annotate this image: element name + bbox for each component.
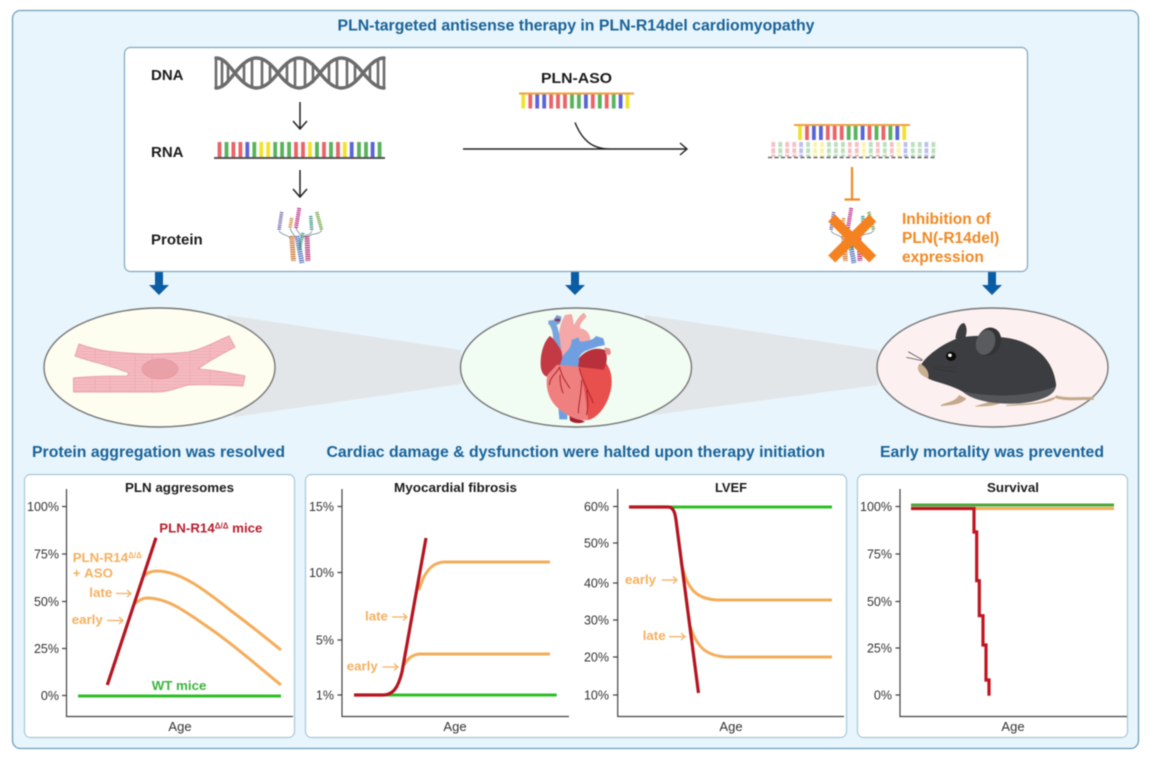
icon: RNA strand [214, 142, 385, 158]
label: late: late [89, 585, 112, 600]
icon: crossed protein [831, 208, 874, 263]
y-axis labels: 25% [867, 642, 892, 656]
x-axis label: Age [1001, 719, 1025, 734]
arrow: inhibition [844, 167, 860, 200]
line: early ASO [681, 562, 832, 600]
line: mutant [354, 538, 426, 695]
panel: cardiac charts [306, 474, 846, 738]
label: RNA: RNA [151, 144, 184, 161]
label: early: early [347, 659, 378, 674]
y-axis labels: 60% [584, 500, 609, 514]
label: late: late [643, 628, 666, 643]
y-axis labels: 50% [34, 595, 59, 609]
line: late ASO [690, 626, 832, 657]
line: PLN-R14 mice [107, 538, 156, 685]
y-axis labels: 100% [860, 500, 892, 514]
text: inhibition of expression: expression [902, 249, 984, 266]
label: PLN-R14 + ASO: + ASO [73, 566, 113, 581]
line: mutant [629, 507, 698, 693]
label: late: late [365, 609, 388, 624]
chart: myocardial fibrosis [309, 480, 569, 734]
y-axis labels: 50% [867, 595, 892, 609]
label: early [72, 612, 123, 627]
arrow: to heart level [565, 271, 585, 295]
icon: ASO bound to faded RNA [768, 125, 937, 158]
y-axis labels: 25% [34, 642, 59, 656]
ellipse: heart [460, 308, 692, 427]
y-axis labels: 40% [584, 576, 609, 590]
label: early [347, 659, 398, 674]
chart title: survival: Survival [987, 480, 1039, 495]
y-axis labels: 75% [867, 548, 892, 562]
panel: PLN aggresomes chart [24, 474, 294, 738]
icon: heart [541, 313, 612, 423]
axes [896, 489, 1127, 716]
label: early: early [72, 612, 103, 627]
label: PLN-R14 mice: mice [228, 521, 262, 536]
y-axis labels [27, 500, 59, 703]
line: mutant [911, 508, 989, 696]
zoom wedge: heart to mouse [645, 315, 878, 415]
icon: DNA helix [216, 58, 384, 88]
y-axis labels: 20% [584, 650, 609, 664]
x-axis label: Age [168, 719, 192, 734]
line: WT [911, 504, 1114, 506]
y-axis labels: 0% [41, 689, 59, 703]
y-axis labels: 10% [584, 688, 609, 702]
line: ASO treated [911, 507, 1114, 510]
heading: early mortality: Early mortality was prevented [880, 444, 1104, 461]
heading: protein aggregation: Protein aggregation was resolved [32, 444, 285, 461]
axes [338, 489, 569, 716]
icon: ASO strand [519, 94, 634, 108]
label: late [89, 585, 131, 600]
arrow: ASO binding to RNA [463, 122, 687, 155]
label: PLN-R14 mice: PLN-R14 [159, 521, 215, 536]
label: late [365, 609, 407, 624]
chart title: LVEF: LVEF [715, 480, 747, 495]
line: early ASO [404, 654, 550, 665]
text: inhibition of expression: Inhibition of [902, 211, 992, 228]
label: late [643, 628, 685, 643]
panel: survival chart [858, 474, 1128, 738]
icon: cardiomyocyte [74, 336, 245, 395]
y-axis labels: 100% [27, 500, 59, 514]
line: control [354, 694, 557, 696]
label: PLN-ASO: PLN-ASO [541, 70, 612, 87]
label: PLN-R14 + ASO: Δ/Δ [128, 551, 142, 560]
arrow: to mouse level [982, 271, 1002, 295]
label: PLN-R14 mice: Δ/Δ [215, 522, 229, 531]
icon: mouse [906, 323, 1094, 407]
y-axis labels: 75% [34, 548, 59, 562]
arrow: to cell level [149, 271, 169, 295]
arrow: DNA to RNA [293, 102, 307, 129]
label: PLN-R14 + ASO: PLN-R14 [73, 550, 129, 565]
panel: mechanism [124, 48, 1028, 272]
label: early [625, 572, 677, 587]
line: early ASO [134, 598, 281, 685]
line: WT mice [78, 694, 281, 698]
y-axis labels: 15% [309, 500, 334, 514]
y-axis labels: 10% [309, 566, 334, 580]
axes [613, 489, 844, 716]
line: control [668, 506, 832, 508]
ellipse: mouse [877, 308, 1108, 427]
y-axis labels: 1% [316, 688, 334, 702]
label: early: early [625, 572, 657, 587]
y-axis labels: 5% [316, 634, 334, 648]
label: protein: Protein [151, 232, 203, 248]
title: PLN-targeted antisense therapy in PLN-R14del cardiomyopathy [338, 18, 815, 34]
y-axis labels: 50% [584, 536, 609, 550]
icon: protein [279, 208, 322, 263]
heading: cardiac damage: Cardiac damage & dysfunction were halted upon therapy initiation [326, 444, 825, 461]
y-axis labels: 0% [874, 688, 892, 702]
chart: LVEF [584, 480, 844, 734]
y-axis labels [584, 500, 609, 702]
chart title: PLN aggresomes: PLN aggresomes [125, 480, 234, 495]
y-axis labels [309, 500, 334, 702]
text: inhibition of expression: PLN(-R14del) [902, 230, 999, 247]
line: late ASO [144, 571, 281, 650]
label: WT mice: WT mice [152, 678, 206, 693]
y-axis labels [860, 500, 892, 702]
chart title: myocardial fibrosis: Myocardial fibrosis [394, 480, 517, 495]
y-axis labels: 30% [584, 614, 609, 628]
zoom wedge: cell to heart [227, 315, 461, 417]
x-axis label: Age [719, 719, 743, 734]
axes [62, 489, 293, 716]
x-axis label: Age [443, 719, 467, 734]
line: late ASO [419, 562, 550, 590]
label: DNA: DNA [151, 67, 184, 84]
ellipse: cardiomyocyte [44, 308, 275, 427]
arrow: RNA to protein [293, 170, 307, 197]
